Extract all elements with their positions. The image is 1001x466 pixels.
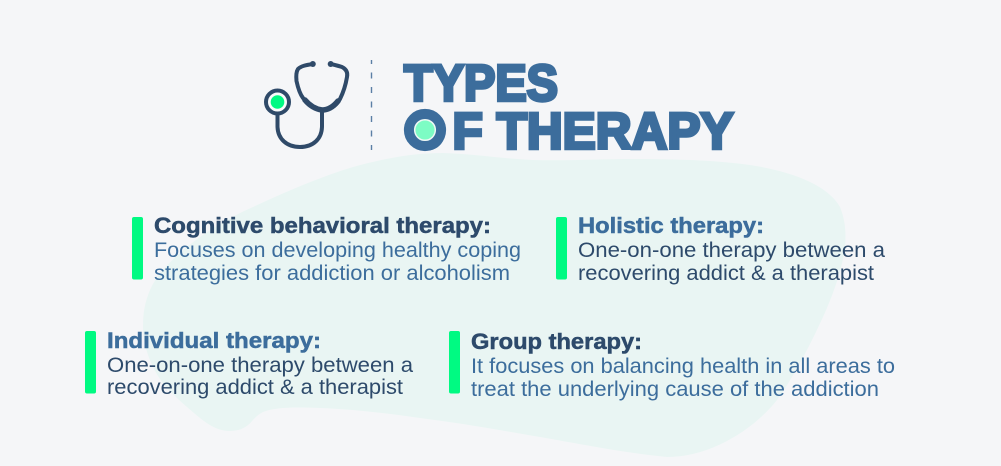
description (471, 355, 895, 401)
heading: Individual therapy: (107, 328, 321, 353)
accent bar (132, 217, 143, 280)
title letter O ring (409, 114, 441, 146)
description: One-on-one therapy between a (578, 239, 885, 262)
heading: Cognitive behavioral therapy: (154, 213, 491, 238)
description: It focuses on balancing health in all areas to (471, 355, 895, 378)
icon: stethoscope tubing (278, 64, 347, 147)
icon: tube junction (305, 100, 338, 110)
icon: chest piece (266, 90, 289, 114)
item: group therapy (449, 329, 895, 401)
description: Focuses on developing healthy coping (154, 239, 521, 262)
heading: Group therapy: (471, 329, 642, 354)
background blob (143, 153, 845, 457)
title line 1: TYPES (404, 54, 558, 112)
icon: earpieces (310, 61, 334, 67)
title line 2: F THERAPY (452, 102, 734, 160)
title (404, 54, 734, 160)
icon: stethoscope (266, 61, 347, 147)
title accent dot (415, 120, 435, 140)
accent bar (85, 331, 96, 394)
item: individual therapy (85, 328, 413, 399)
accent bar (449, 331, 460, 394)
dashed divider (370, 60, 372, 150)
description (107, 354, 413, 399)
item: cognitive behavioral therapy (132, 213, 521, 285)
accent bar (556, 217, 567, 280)
heading: Holistic therapy: (578, 213, 764, 238)
description: treat the underlying cause of the addiction (471, 378, 879, 401)
title line 2: O (406, 102, 446, 160)
description (578, 239, 885, 285)
description: recovering addict & a therapist (107, 376, 403, 399)
description: recovering addict & a therapist (578, 262, 874, 285)
description: One-on-one therapy between a (107, 354, 413, 377)
description: strategies for addiction or alcoholism (154, 262, 510, 285)
item: holistic therapy (556, 213, 885, 285)
description (154, 239, 521, 285)
